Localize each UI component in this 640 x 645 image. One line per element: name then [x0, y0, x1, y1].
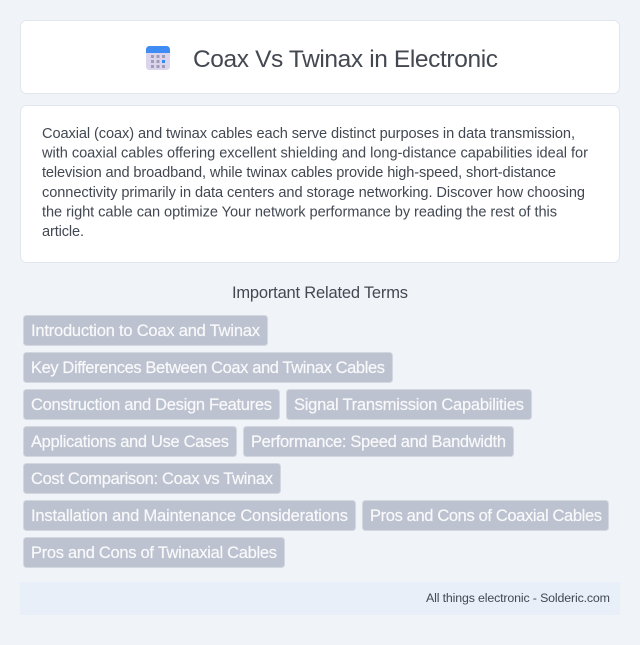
intro text block: connectivity primarily in data centers and storage networking. Discover how choosing: [42, 185, 585, 201]
tag: applications: Applications and Use Cases: [31, 433, 229, 451]
tag: cost comparison: [24, 464, 280, 494]
tag: introduction: Introduction to Coax and Twinax: [31, 322, 261, 340]
tag: pros and cons coaxial: [362, 500, 608, 530]
intro text block: with coaxial cables offering excellent shielding and long-distance capabilities ideal for: [41, 146, 588, 162]
tag: introduction: [24, 316, 268, 346]
title: Coax Vs Twinax in Electronic: [193, 46, 498, 73]
tag: applications: [24, 426, 236, 456]
icon: calendar: [146, 46, 170, 70]
tag: construction: [24, 390, 280, 420]
tag: pros and cons twinaxial: Pros and Cons of Twinaxial Cables: [31, 544, 277, 562]
tag: construction: Construction and Design Features: [31, 396, 272, 414]
tag: signal transmission: Signal Transmission Capabilities: [294, 396, 524, 414]
panel: intro paragraph: [20, 106, 620, 262]
tag: key differences: Key Differences Between Coax and Twinax Cables: [31, 359, 385, 377]
header panel: [20, 20, 620, 94]
footer: [20, 582, 620, 615]
tag: installation: [24, 500, 356, 530]
intro text block: Coaxial (coax) and twinax cables each serve distinct purposes in data transmission,: [42, 126, 575, 142]
footer: All things electronic - Solderic.com: [426, 591, 610, 605]
tag: cost comparison: Cost Comparison: Coax vs Twinax: [31, 470, 274, 488]
intro text block: television and broadband, while twinax cables provide high-speed, short-distance: [42, 165, 556, 181]
tag: key differences: [24, 352, 392, 382]
tag: signal transmission: [286, 390, 532, 420]
intro text block: article.: [42, 224, 84, 240]
heading: related terms: Important Related Terms: [232, 284, 408, 302]
tag: performance: [244, 426, 514, 456]
tag: pros and cons coaxial: Pros and Cons of Coaxial Cables: [370, 507, 602, 525]
tag: pros and cons twinaxial: [24, 538, 284, 568]
tag: installation: Installation and Maintenance Considerations: [31, 507, 348, 525]
tag: performance: Performance: Speed and Bandwidth: [251, 433, 506, 451]
intro text block: the right cable can optimize Your network performance by reading the rest of this: [42, 204, 557, 220]
intro text block: [41, 126, 588, 240]
